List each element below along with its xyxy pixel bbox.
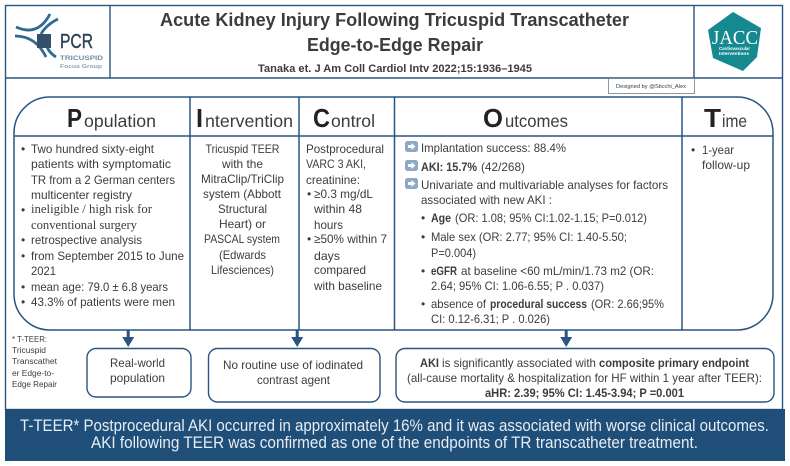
intervention text <box>201 142 284 277</box>
control text: • <box>307 232 311 246</box>
intervention text: system (Abbott <box>203 187 282 201</box>
heading: population: opulation <box>84 111 156 131</box>
outcomes text: P=0.004) <box>431 246 476 260</box>
outcomes text: Univariate and multivariable analyses for factors <box>421 178 668 192</box>
designer credit: Designed by @Sticchi_Alex <box>616 84 686 90</box>
title <box>160 9 629 55</box>
callout: real-world population: Real-world <box>110 356 165 370</box>
arrow: control to contrast agent <box>291 330 303 347</box>
heading: outcomes: O <box>483 103 503 133</box>
callout: composite primary endpoint: is significantly associated with <box>442 356 596 370</box>
control text: with baseline <box>313 279 382 293</box>
logo: JACC Cardiovascular Interventions: Interventions <box>719 51 750 56</box>
outcomes text: • <box>421 211 425 225</box>
heading: intervention: ntervention <box>205 111 293 131</box>
callout: composite primary endpoint: (all-cause mortality & hospitalization for HF within 1 year after TEER): <box>407 371 762 385</box>
heading: time: T <box>704 103 721 133</box>
population bullets: conventional surgery <box>31 217 137 232</box>
outcomes text: (42/268) <box>481 160 525 174</box>
logo: JACC Cardiovascular Interventions: JACC <box>712 27 758 49</box>
outcomes text: CI: 0.12-6.31; P . 0.026) <box>431 312 550 326</box>
population bullets: Two hundred sixty-eight <box>31 142 155 156</box>
outcomes text: • <box>421 230 425 244</box>
logo: PCR Tricuspid Focus Group <box>15 14 103 70</box>
callout: composite primary endpoint: aHR: 2.39; 95% CI: 1.45-3.94; P =0.001 <box>485 386 684 400</box>
heading: time: ime <box>722 111 747 131</box>
population bullets: • <box>21 249 25 263</box>
population bullets: mean age: 79.0 ± 6.8 years <box>31 280 168 294</box>
heading: control <box>313 103 375 133</box>
heading: outcomes <box>483 103 568 133</box>
population bullets: from September 2015 to June <box>31 249 184 263</box>
control text: hours <box>314 218 343 232</box>
population bullets: • <box>21 295 25 309</box>
outcomes text: • <box>421 297 425 311</box>
control text: ≥0.3 mg/dL <box>314 187 373 201</box>
designer credit <box>608 78 694 94</box>
control text: VARC 3 AKI, <box>306 157 366 171</box>
callout: real-world population: population <box>110 371 165 385</box>
logo: PCR Tricuspid Focus Group: TRICUSPID <box>60 55 103 62</box>
intervention text: (Edwards <box>219 248 266 262</box>
callout: composite primary endpoint: composite primary endpoint <box>599 356 749 370</box>
citation: Tanaka et. J Am Coll Cardiol Intv 2022;15:1936–1945 <box>258 63 532 75</box>
callout: real-world population <box>87 348 191 397</box>
intervention text: PASCAL system <box>204 232 280 246</box>
heading: time <box>704 103 747 133</box>
logo: JACC Cardiovascular Interventions <box>708 12 761 71</box>
title: Acute Kidney Injury Following Tricuspid Transcatheter <box>160 9 629 30</box>
heading: control: C <box>313 103 330 133</box>
outcomes text: at baseline <60 mL/min/1.73 m2 (OR: <box>461 264 654 278</box>
arrow: outcomes to composite endpoint <box>560 330 572 347</box>
time text <box>691 143 750 172</box>
population bullets: • <box>21 233 25 247</box>
control text: compared <box>314 263 366 277</box>
panel: time <box>691 103 750 172</box>
icon: arrow bullets <box>405 141 418 189</box>
table frame <box>14 97 773 330</box>
outcomes text: (OR: 2.66;95% <box>591 297 664 311</box>
conclusion banner: AKI following TEER was confirmed as one of the endpoints of TR transcatheter treatment. <box>91 434 698 452</box>
heading: population: P <box>67 103 82 133</box>
callout: no routine contrast <box>208 348 380 402</box>
outcomes text: Age <box>431 211 451 225</box>
outcomes text: eGFR <box>431 264 457 278</box>
population bullets: • <box>21 280 25 294</box>
heading: outcomes: utcomes <box>505 111 568 131</box>
outcomes text: Male sex (OR: 2.77; 95% CI: 1.40-5.50; <box>431 230 627 244</box>
control text: • <box>307 187 311 201</box>
panel: population <box>21 103 184 309</box>
panel: intervention <box>196 103 293 277</box>
outcomes text: procedural success <box>490 297 587 311</box>
population bullets: 43.3% of patients were men <box>31 295 175 309</box>
control text: days <box>314 249 340 263</box>
population bullets: retrospective analysis <box>31 233 142 247</box>
intervention text: MitraClip/TriClip <box>201 172 284 186</box>
population bullets: ineligible / high risk for <box>31 201 153 216</box>
footnote: Transcathet <box>12 357 58 366</box>
population bullets: TR from a 2 German centers <box>31 173 175 187</box>
outcomes text: absence of <box>431 297 487 311</box>
logo: JACC Cardiovascular Interventions: Cardiovascular <box>719 46 750 51</box>
heading: intervention <box>196 103 293 133</box>
outcomes text: 2.64; 95% CI: 1.06-6.55; P . 0.037) <box>431 279 604 293</box>
footnote: Edge Repair <box>12 380 57 389</box>
population bullets: multicenter registry <box>31 188 132 202</box>
population bullets: • <box>21 203 25 217</box>
footnote: * T-TEER: <box>12 335 47 344</box>
time text: • <box>691 143 695 157</box>
heading: population <box>67 103 156 133</box>
intervention text: Structural <box>218 202 267 216</box>
outcomes text: AKI: 15.7% <box>421 160 477 174</box>
logo: PCR Tricuspid Focus Group: Focus Group <box>60 64 103 70</box>
population bullets: 2021 <box>31 264 56 278</box>
intervention text: with the <box>221 157 263 171</box>
outcomes text: • <box>421 264 425 278</box>
control text <box>306 142 387 293</box>
callout: no routine contrast: contrast agent <box>257 373 331 387</box>
footnote <box>12 335 58 389</box>
heading: intervention: I <box>196 103 203 133</box>
control text: creatinine: <box>306 173 360 187</box>
control text: ≥50% within 7 <box>314 232 387 246</box>
title: Edge-to-Edge Repair <box>307 34 483 55</box>
population bullets: • <box>21 142 25 156</box>
intervention text: Tricuspid TEER <box>206 142 280 156</box>
intervention text: Lifesciences) <box>211 263 274 277</box>
heading: control: ontrol <box>331 111 375 131</box>
callout: composite primary endpoint: AKI <box>420 356 439 370</box>
population bullets: patients with symptomatic <box>31 157 171 171</box>
outcomes text: associated with new AKI : <box>421 193 552 207</box>
time text: 1-year <box>702 143 734 157</box>
PICOT table <box>14 97 773 330</box>
outcomes text: Implantation success: 88.4% <box>421 141 566 155</box>
callout: no routine contrast: No routine use of iodinated <box>223 358 363 372</box>
callout: composite primary endpoint <box>396 348 774 402</box>
logo: PCR Tricuspid Focus Group: PCR <box>60 31 93 53</box>
intervention text: Heart) or <box>219 217 266 231</box>
panel: outcomes <box>405 103 668 326</box>
control text: Postprocedural <box>306 142 384 156</box>
outcomes text <box>421 141 668 326</box>
control text: within 48 <box>313 202 362 216</box>
population bullets <box>21 142 184 309</box>
time text: follow-up <box>702 158 750 172</box>
footnote: er Edge-to- <box>12 369 54 378</box>
arrow: population to real-world <box>122 330 134 347</box>
panel: control <box>306 103 387 293</box>
conclusion banner <box>5 409 785 461</box>
footnote: Tricuspid <box>12 346 46 355</box>
outcomes text: (OR: 1.08; 95% CI:1.02-1.15; P=0.012) <box>455 211 647 225</box>
